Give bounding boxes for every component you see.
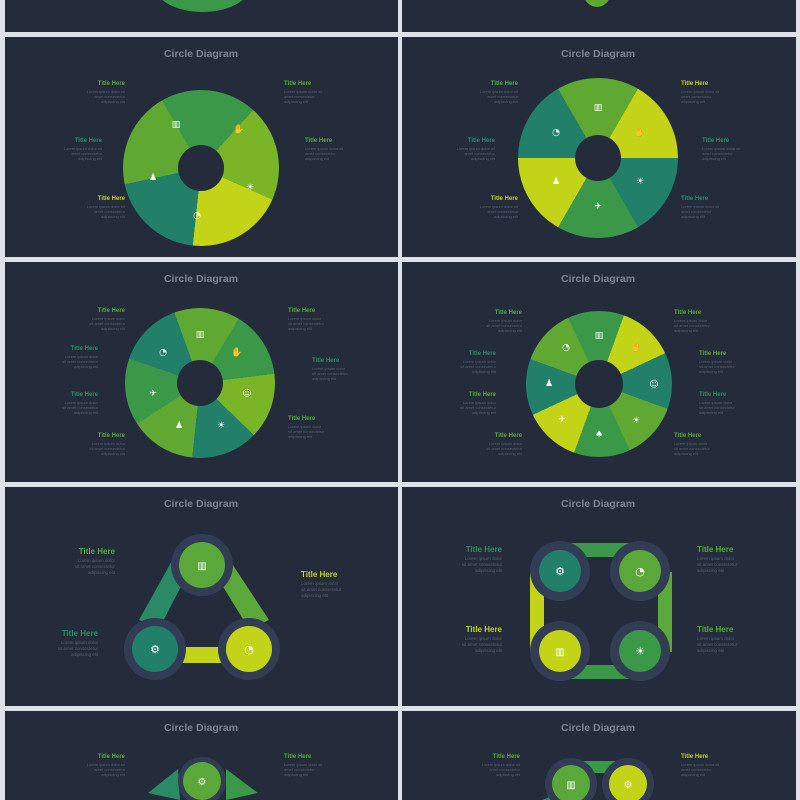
icons: ◔ [193,211,201,221]
text: left 4: sit amet consectetur [486,446,522,451]
diagram: square of circles: ⚙ [555,566,565,578]
text: top-left: Lorem ipsum dolor sit [480,89,518,94]
icons: ✋ [231,348,243,358]
heading: Circle Diagram [561,48,635,60]
text: mid-right: adipiscing elit [305,156,329,161]
text: right: Title Here [284,754,311,760]
text: top-left: adipiscing elit [494,99,518,104]
text: mid-right: amet consectetur [305,151,336,156]
text: right: Title Here [681,754,708,760]
text: left 4: adipiscing elit [498,451,522,456]
slide: top-right partial [402,0,796,32]
slide: bottom-right partial [402,711,796,800]
slide: 5-part circle [5,37,398,257]
text: left 4: Title Here [495,433,522,439]
icons: ▥ [172,120,180,130]
slide: bottom-left partial [5,711,398,800]
text: bottom-left: sit amet consectetur [462,642,502,647]
text: right 1: sit amet consectetur [288,321,324,326]
text: bottom-left: Lorem ipsum dolor [465,636,502,641]
text: bottom-left: Lorem ipsum dolor sit [87,204,125,209]
diagram: 5 segments [123,90,279,246]
text: left 3: Title Here [469,392,496,398]
text: right 1: Title Here [674,310,701,316]
text: top-left: Lorem ipsum dolor [465,556,502,561]
slide: 7-part circle [5,262,398,482]
text: top-left: amet consectetur [94,94,125,99]
text: top-left: adipiscing elit [101,99,125,104]
text: left 4: Title Here [98,433,125,439]
text: bottom-left [480,196,518,219]
text: left: adipiscing elit [496,772,520,777]
text: top-left: sit amet consectetur [75,564,115,569]
diagram: 7 segments [125,308,275,458]
icons: ▥ [196,330,204,340]
text: left 4: Lorem ipsum dolor [489,441,522,446]
text: top-right [284,80,322,104]
slide: top-left partial [5,0,398,32]
text: left 2: Title Here [469,351,496,357]
icons [552,103,646,212]
text: left 1: Lorem ipsum dolor [489,318,522,323]
text: left 2: adipiscing elit [74,364,98,369]
text: top-left: Lorem ipsum dolor sit [87,89,125,94]
text: right 2: Lorem ipsum dolor [312,366,345,371]
text: left 1: Lorem ipsum dolor [92,316,125,321]
diagram: square of circles: ◔ [635,565,645,578]
icons [545,331,659,440]
text: right 3: Title Here [699,392,726,398]
diagram: triangle of circles: ▥ [197,561,207,572]
diagram: 6 segments [518,78,678,238]
text: left 1: sit amet consectetur [89,321,125,326]
text: right 1: sit amet consectetur [674,323,710,328]
icons: ◔ [159,348,167,358]
icons: ♟ [175,421,183,431]
text: left 4: adipiscing elit [101,451,125,456]
text: left: amet consectetur [489,767,520,772]
text: top-right: Title Here [681,81,708,87]
icons: ✈ [149,389,157,399]
text: right 2: Title Here [312,358,339,364]
text: left 4: Lorem ipsum dolor [92,441,125,446]
text: top-right: Lorem ipsum dolor [697,556,734,561]
text: top-right [681,80,720,104]
text: left 4: sit amet consectetur [89,446,125,451]
text: top-right [697,545,738,573]
text: mid-left: amet consectetur [71,151,102,156]
text: top-left [480,80,518,104]
text: top-left: Title Here [98,81,125,87]
text: bottom-left: Title Here [491,196,518,202]
icons: ☺ [242,389,252,399]
text: right [681,753,743,777]
text: left 4 [486,432,522,456]
text: bottom-right [681,196,720,219]
text: left: Lorem ipsum dolor sit [87,762,125,767]
text: left 3: sit amet consectetur [62,405,98,410]
text: top-left [462,545,502,573]
text: right 2: adipiscing elit [312,376,336,381]
text: left 1: Title Here [495,310,522,316]
text: bottom-left [462,625,502,653]
text: bottom-right: adipiscing elit [681,214,705,219]
text: right 1: adipiscing elit [674,328,698,333]
text: left: Title Here [98,754,125,760]
icons: ♟ [149,173,157,183]
text: top-left: Title Here [79,547,115,556]
text: right 2 [699,350,735,374]
text: left: Lorem ipsum dolor sit [482,762,520,767]
text: mid-right: amet consectetur [702,151,733,156]
text: right: adipiscing elit [301,593,328,598]
text: bottom-left: Title Here [466,625,502,634]
diagram: square of circles [530,541,672,681]
text: top-left: adipiscing elit [88,570,115,575]
text: right 3: Lorem ipsum dolor [288,424,321,429]
text: right 2: adipiscing elit [699,369,723,374]
text: mid-right: adipiscing elit [702,156,726,161]
text: mid-right: Lorem ipsum dolor sit [305,146,343,151]
text: bottom-left [87,196,125,219]
diagram: partial arrows and circle [148,757,258,800]
text: left 3: Lorem ipsum dolor [463,400,496,405]
text: right: amet consectetur [681,767,712,772]
text: left 2: Lorem ipsum dolor [463,359,496,364]
text: right 3: sit amet consectetur [699,405,735,410]
icons: ♟ [545,379,553,389]
text: top-left: amet consectetur [487,94,518,99]
text: top-right: adipiscing elit [697,568,724,573]
text: mid-left: Lorem ipsum dolor sit [457,146,495,151]
text: right: Title Here [301,570,337,579]
text: mid-left: Title Here [75,138,102,144]
text: right 4: Lorem ipsum dolor [674,441,707,446]
diagram: partial circles [402,711,796,800]
text: left: Title Here [493,754,520,760]
text: bottom-right: Lorem ipsum dolor sit [681,204,719,209]
text: left [458,753,520,777]
heading: Circle Diagram [164,273,238,285]
icons: ☀ [632,416,640,426]
text: left 3: Title Here [71,392,98,398]
text: right: adipiscing elit [284,772,308,777]
text: mid-left [457,138,495,161]
text: left 1 [89,308,125,331]
text: mid-left: adipiscing elit [471,156,495,161]
text: left: amet consectetur [94,767,125,772]
text: mid-left: Lorem ipsum dolor sit [64,146,102,151]
text: left 4 [89,432,125,456]
text: left 2 [460,350,496,374]
heading: Circle Diagram [164,48,238,60]
text: bottom-right: Lorem ipsum dolor [697,636,734,641]
heading: Circle Diagram [164,722,238,734]
icons: ▥ [595,331,603,341]
text: right: Lorem ipsum dolor [301,581,338,586]
text: right 3: adipiscing elit [699,410,723,415]
text: right 1 [288,308,324,331]
diagram: triangle of circles: ◔ [244,643,254,656]
text: right 1: Lorem ipsum dolor [674,318,707,323]
icons: ☺ [649,380,659,390]
text: right 2: Title Here [699,351,726,357]
text: right 3: adipiscing elit [288,434,312,439]
text: left 2: adipiscing elit [472,369,496,374]
slide: square [402,487,796,706]
text: top-left: Title Here [491,81,518,87]
text: right 2: sit amet consectetur [312,371,348,376]
text: bottom-right [697,625,738,653]
text: right: Lorem ipsum dolor sit [681,762,719,767]
text: bottom-left: amet consectetur [94,209,125,214]
text: left 1: adipiscing elit [498,328,522,333]
text: left: adipiscing elit [101,772,125,777]
text: bottom-left: adipiscing elit [494,214,518,219]
text: top-right: Lorem ipsum dolor sit [681,89,719,94]
text: top-left [87,80,125,104]
text: left 2: sit amet consectetur [460,364,496,369]
icons: ☀ [217,421,225,431]
icons: ☀ [636,177,644,187]
text: bottom-left: adipiscing elit [71,652,98,657]
icons: ✋ [631,343,643,353]
text: left 2: sit amet consectetur [62,359,98,364]
diagram bottom [582,0,612,7]
text: bottom-left: adipiscing elit [475,648,502,653]
text: right 3: Lorem ipsum dolor [699,400,732,405]
text: bottom-right: Title Here [681,196,708,202]
text: bottom-left [58,629,98,657]
text: right 1: Lorem ipsum dolor [288,316,321,321]
text: left 1: Title Here [98,308,125,314]
text: left 3: adipiscing elit [472,410,496,415]
text: mid-right [702,138,740,161]
text: top-right: amet consectetur [284,94,315,99]
text: right 2: sit amet consectetur [699,364,735,369]
text: bottom-left: sit amet consectetur [58,646,98,651]
icons: ☀ [246,183,254,193]
text: left 3 [62,392,98,415]
text: bottom-left: Lorem ipsum dolor [61,640,98,645]
text: left [63,753,125,777]
text: mid-left: adipiscing elit [78,156,102,161]
text: right 4 [674,432,710,456]
text: right 4: sit amet consectetur [674,446,710,451]
text: left 3 [460,392,496,415]
icons: ▥ [594,103,602,113]
text: bottom-right: amet consectetur [681,209,712,214]
slide: 6-part circle [402,37,796,257]
text: mid-right: Title Here [305,138,332,144]
text: top-right: adipiscing elit [284,99,308,104]
text: bottom-left: Title Here [62,629,98,638]
diagram: square of circles: ▥ [555,647,565,658]
text: top-right: adipiscing elit [681,99,705,104]
text: top-left: Title Here [466,545,502,554]
text: bottom-right: sit amet consectetur [697,642,737,647]
slide: triangle [5,487,398,706]
text: top-left: sit amet consectetur [462,562,502,567]
text: right 3: sit amet consectetur [288,429,324,434]
text: top-right: sit amet consectetur [697,562,737,567]
text: right 2: Lorem ipsum dolor [699,359,732,364]
text: top-left: adipiscing elit [475,568,502,573]
text: right 2 [312,358,348,381]
text: left 3: Lorem ipsum dolor [65,400,98,405]
icons [149,120,254,221]
diagram: triangle of circles: ⚙ [150,644,160,656]
text: top-left: Lorem ipsum dolor [78,558,115,563]
slide: 8-part circle [402,262,796,482]
text: right 3 [699,392,735,415]
text: left 2 [62,346,98,369]
text: top-right: Title Here [284,81,311,87]
text: right [301,570,342,598]
text: left 3: sit amet consectetur [460,405,496,410]
icons: ✈ [558,415,566,425]
icons: ✋ [634,128,646,138]
text: right: adipiscing elit [681,772,705,777]
text: right 4: adipiscing elit [674,451,698,456]
text: mid-left: amet consectetur [464,151,495,156]
text: right: sit amet consectetur [301,587,341,592]
text: left 1 [486,310,522,333]
text: right: Lorem ipsum dolor sit [284,762,322,767]
text: mid-right: Lorem ipsum dolor sit [702,146,740,151]
text: right [284,753,346,777]
text: left 2: Title Here [71,346,98,352]
text: left 1: sit amet consectetur [486,323,522,328]
diagram bottom [155,0,250,12]
text: right 4: Title Here [674,433,701,439]
text: left 3: adipiscing elit [74,410,98,415]
text: bottom-right: adipiscing elit [697,648,724,653]
text: right 1: Title Here [288,308,315,314]
icons: ♠ [595,430,603,440]
heading: Circle Diagram [561,722,635,734]
text: bottom-right: Title Here [697,625,733,634]
text: top-right: amet consectetur [681,94,712,99]
heading: Circle Diagram [561,273,635,285]
text: mid-left: Title Here [468,138,495,144]
heading: Circle Diagram [561,498,635,510]
diagram: 8 segments [526,311,672,457]
text: bottom-left: adipiscing elit [101,214,125,219]
icons: ◔ [552,128,560,138]
text: top-right: Title Here [697,545,733,554]
diagram: triangle of circles [124,534,280,680]
text: right: amet consectetur [284,767,315,772]
text: top-left [75,547,115,575]
text: right 3 [288,416,324,439]
text: bottom-left: amet consectetur [487,209,518,214]
icons [149,330,252,431]
icons: ♟ [552,177,560,187]
text: bottom-left: Lorem ipsum dolor sit [480,204,518,209]
text: bottom-left: Title Here [98,196,125,202]
text: right 1 [674,310,710,333]
text: top-right: Lorem ipsum dolor sit [284,89,322,94]
text: mid-left [64,138,102,161]
icons: ✋ [233,125,245,135]
text: mid-right: Title Here [702,138,729,144]
text: left 1: adipiscing elit [101,326,125,331]
diagram: partial arrows and circle: ⚙ [198,777,206,788]
text: mid-right [305,138,344,161]
diagram: partial circles: ⚙ [624,780,632,791]
diagram: square of circles: ☀ [635,645,645,658]
text: right 1: adipiscing elit [288,326,312,331]
text: right 3: Title Here [288,416,315,422]
icons: ◔ [562,343,570,353]
diagram: partial circles: ▥ [566,780,576,791]
icons: ✈ [594,202,602,212]
text: left 2: Lorem ipsum dolor [65,354,98,359]
heading: Circle Diagram [164,498,238,510]
